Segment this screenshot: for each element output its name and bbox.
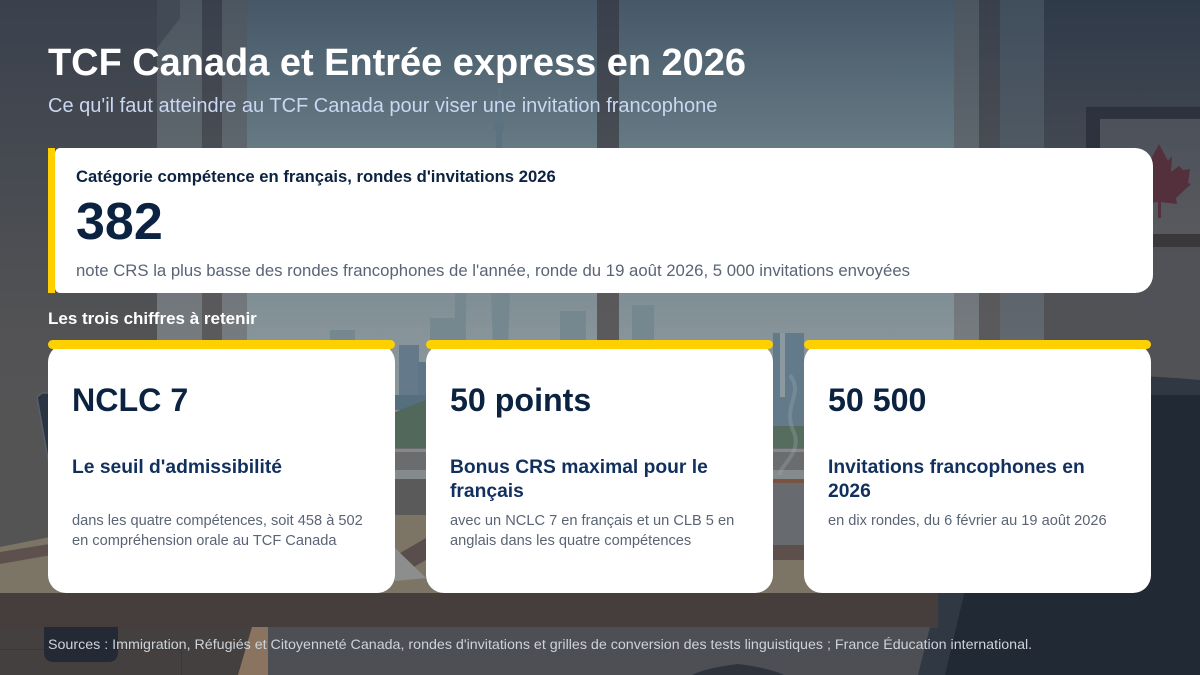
panel: hero statistic [48,148,1153,293]
background: trees [395,400,426,448]
background: window frames [157,0,1044,450]
card heading: français [450,481,524,502]
card heading: Invitations francophones en [828,457,1085,478]
background: skyline [330,293,804,428]
hero number: 382 [76,193,163,251]
title: TCF Canada et Entrée express en 2026 [48,42,746,84]
background: lower floor [0,627,930,675]
figure: 50 points [450,382,591,418]
card text: en dix rondes, du 6 février au 19 août 2026 [828,513,1107,529]
card heading: Bonus CRS maximal pour le [450,457,708,478]
card heading [828,457,1085,502]
accent bar [48,148,55,293]
card text [72,513,363,549]
card heading: 2026 [828,481,871,502]
figure: 50 500 [828,382,926,418]
background: right wall [1043,0,1200,520]
background: chair [918,376,1200,675]
card text: avec un NCLC 7 en français et un CLB 5 en [450,513,734,529]
hero card background [55,148,1153,293]
background: distant skyline upper [494,88,504,150]
panel: 50 points [426,340,773,593]
card heading [450,457,708,502]
card heading: Le seuil d'admissibilité [72,457,282,478]
figure: NCLC 7 [72,382,188,418]
card text: en compréhension orale au TCF Canada [72,533,336,549]
background: laptop edge [37,393,60,470]
background: desk front [0,593,938,628]
hero label: Catégorie compétence en français, rondes d'invitations 2026 [76,166,556,186]
panel: 50 500 [804,340,1151,593]
background: window sky [157,0,1044,450]
subtitle: Ce qu'il faut atteindre au TCF Canada pour viser une invitation francophone [48,94,717,116]
card text [450,513,734,549]
card text: dans les quatre compétences, soit 458 à 502 [72,513,363,529]
card text: anglais dans les quatre compétences [450,533,691,549]
panel: NCLC 7 [48,340,395,593]
sources: Sources : Immigration, Réfugiés et Citoyenneté Canada, rondes d'invitations et grilles de conversion des tests linguistiques ; France Éducation international. [48,637,1032,653]
background: window sill [157,448,1044,519]
background: picture frame and maple leaf [1086,107,1200,247]
background: desk [0,375,1043,600]
background: left wall [0,0,158,675]
section heading: Les trois chiffres à retenir [48,308,257,328]
hero note: note CRS la plus basse des rondes francophones de l'année, ronde du 19 août 2026, 5 000 invitations envoyées [76,261,910,280]
